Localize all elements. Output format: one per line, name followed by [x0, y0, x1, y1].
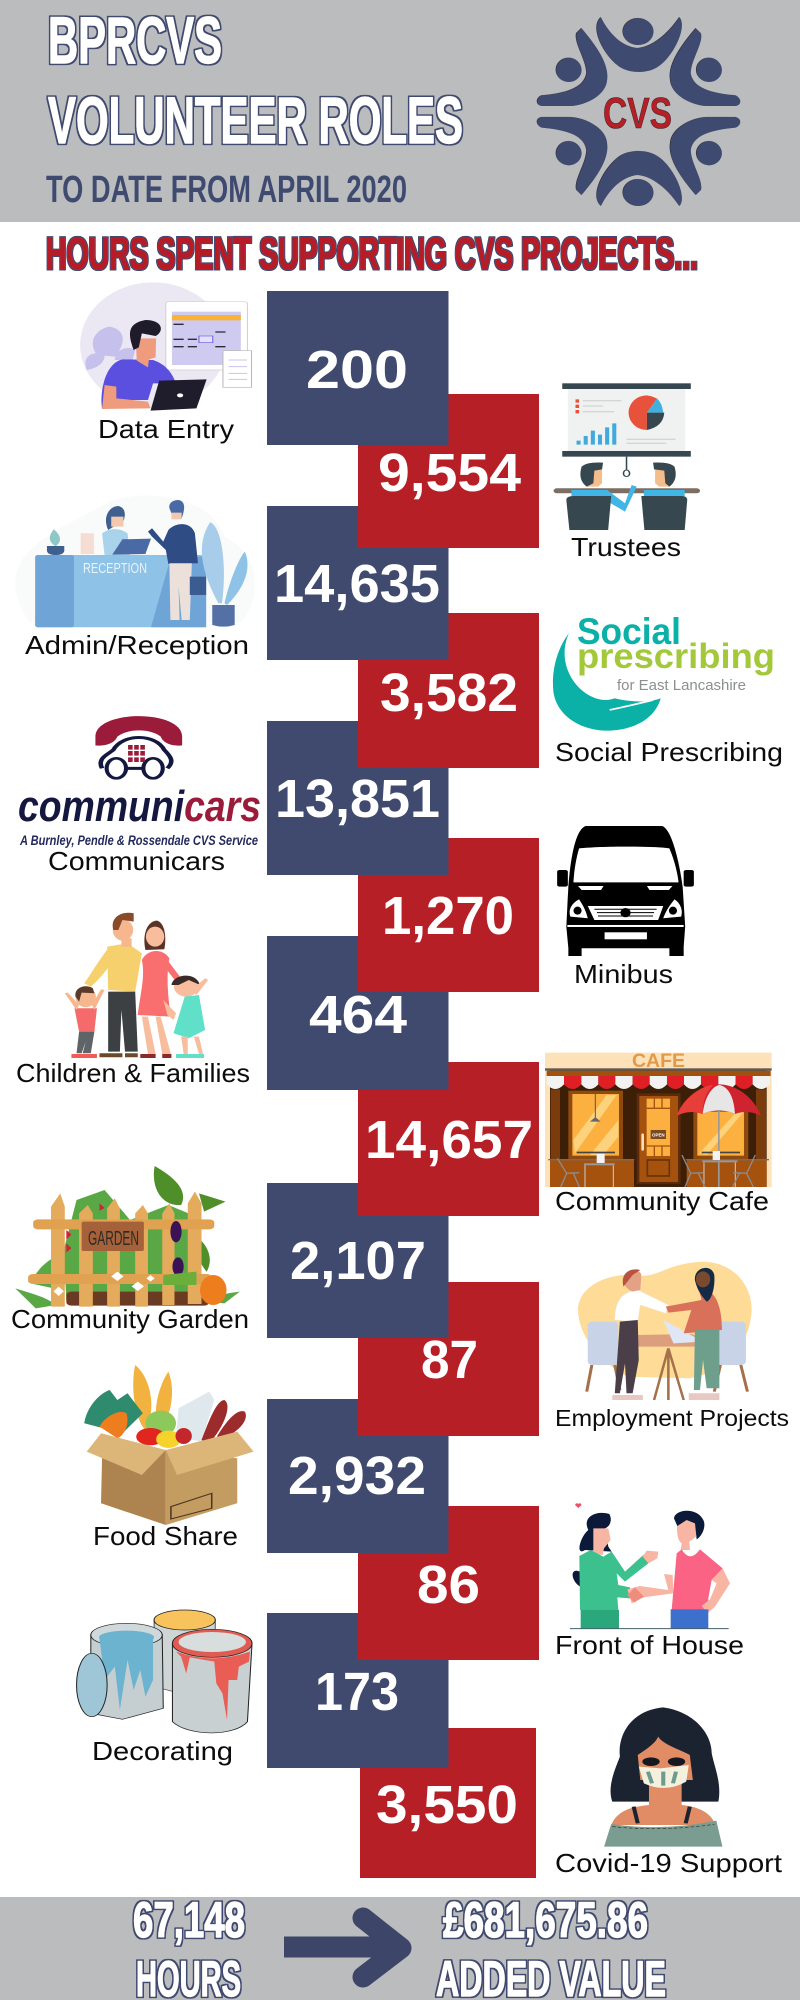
icon: data entry [80, 282, 252, 411]
panel: red block Employment Projects: 87 [421, 1330, 478, 1390]
logo tagline: for East Lancashire [617, 677, 746, 694]
title: volunteer roles: VOLUNTEER ROLES [48, 83, 463, 157]
garden sign lettering: GARDEN [88, 1228, 139, 1250]
panel: red block Community Cafe [358, 1062, 539, 1216]
total hours figure: 67,148 [133, 1892, 245, 1948]
icon: minibus [557, 826, 694, 956]
panel: red block Social Prescribing [358, 613, 539, 768]
panel: blue block Admin/Reception [267, 506, 448, 660]
date subtitle: TO DATE FROM APRIL 2020 [46, 169, 407, 211]
label: Minibus: Minibus [574, 959, 673, 989]
panel: blue block Decorating: 173 [315, 1662, 399, 1722]
label: Communicars: Communicars [48, 846, 225, 876]
label: Food Share: Food Share [93, 1521, 238, 1551]
icon: communicars logo [18, 716, 261, 848]
added value figure: £681,675.86 [443, 1892, 648, 1948]
icon: cafe storefront: OPEN [652, 1133, 665, 1138]
logo word: Social: Social [577, 611, 681, 652]
panel: red block Trustees: 9,554 [378, 443, 521, 503]
logo word: prescribing: prescribing [577, 637, 775, 676]
icon: cafe storefront [545, 1051, 772, 1187]
panel: blue block Admin/Reception: 14,635 [274, 554, 440, 614]
panel: red block Front of House [358, 1506, 539, 1660]
label: Children and Families: Children & Families [16, 1058, 250, 1088]
desk lettering: RECEPTION [83, 560, 147, 577]
icon: community garden [15, 1166, 240, 1308]
logo text: CVS [603, 89, 672, 138]
panel: blue block Data Entry [267, 291, 448, 445]
panel: blue block Communicars: 13,851 [275, 769, 440, 829]
panel: red block Covid-19 Support [360, 1728, 536, 1878]
label: Social Prescribing: Social Prescribing [555, 737, 783, 767]
panel: red block Trustees [358, 394, 539, 548]
panel: blue block Food Share [267, 1399, 448, 1553]
panel: blue block Children and Families: 464 [309, 985, 407, 1045]
icon: paint cans [77, 1610, 252, 1733]
panel: blue block Data Entry: 200 [306, 340, 408, 400]
label: Employment Projects: Employment Projects [555, 1405, 789, 1431]
label: Trustees: Trustees [571, 532, 681, 562]
label: Decorating: Decorating [92, 1736, 233, 1766]
panel: red block Minibus: 1,270 [382, 886, 514, 946]
icon: CVS logo [537, 17, 740, 206]
label: Admin/Reception: Admin/Reception [25, 630, 249, 660]
title: BPRCVS: BPRCVS [48, 3, 222, 77]
icon: social prescribing logo [553, 611, 775, 731]
panel: red block Employment Projects [358, 1282, 539, 1436]
panel: blue block Children and Families [267, 936, 448, 1090]
label: Community Cafe: Community Cafe [555, 1186, 769, 1216]
panel: blue block Food Share: 2,932 [288, 1446, 426, 1506]
label: Data Entry: Data Entry [98, 414, 234, 444]
panel: red block Social Prescribing: 3,582 [380, 663, 518, 723]
label: Community Garden: Community Garden [11, 1304, 249, 1334]
icon: food share box [84, 1365, 254, 1525]
icon: family [65, 913, 208, 1058]
panel: blue block Community Garden [267, 1183, 448, 1338]
label: Front of House: Front of House [555, 1630, 744, 1660]
icon: front of house handshake [570, 1503, 730, 1629]
panel: blue block Communicars [267, 721, 448, 875]
panel: red block Front of House: 86 [417, 1555, 480, 1615]
cafe sign lettering: CAFE [632, 1051, 685, 1072]
logo wordmark: communicars [18, 782, 261, 831]
icon: trustees presentation [554, 383, 700, 530]
icon: reception desk [15, 495, 255, 627]
panel: red block Minibus [358, 838, 539, 992]
panel: blue block Decorating [267, 1613, 448, 1768]
label: Covid-19 Support: Covid-19 Support [555, 1848, 783, 1878]
footer band [0, 1892, 800, 2000]
panel: blue block Community Garden: 2,107 [290, 1231, 426, 1291]
panel: red block Community Cafe: 14,657 [365, 1110, 533, 1170]
logo tagline: A Burnley, Pendle & Rossendale CVS Service [19, 833, 258, 848]
icon: employment projects handshake [578, 1262, 752, 1400]
arrow [284, 1918, 401, 1977]
panel: red block Covid-19 Support: 3,550 [376, 1775, 518, 1835]
header band [0, 0, 800, 222]
icon: woman with face mask [604, 1707, 722, 1847]
